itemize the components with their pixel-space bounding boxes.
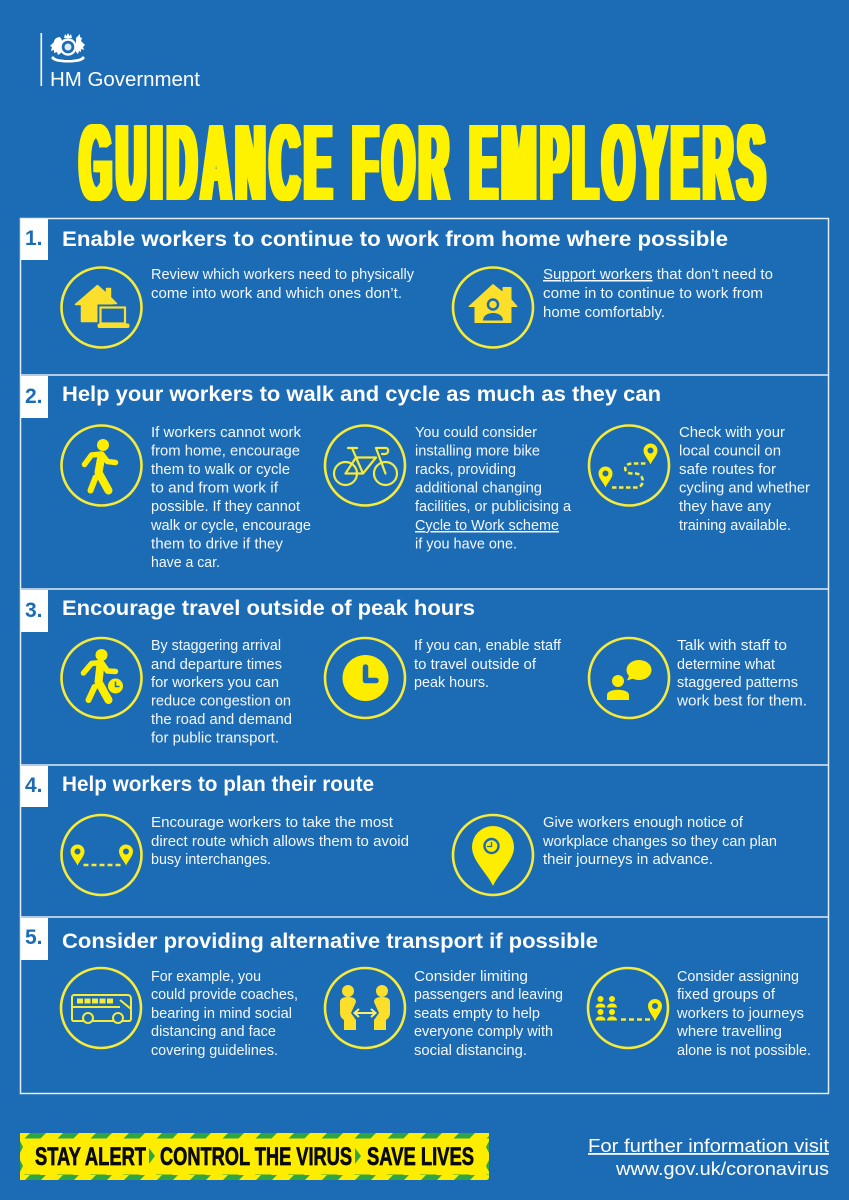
heading 1: Enable workers to continue to work from home where possible — [62, 228, 728, 251]
title: GUIDANCE FOR EMPLOYERS — [80, 102, 769, 224]
text: travel outside peak: to travel outside of — [414, 656, 537, 673]
text: fixed groups — [676, 968, 811, 1059]
text: give notice: their journeys in advance. — [543, 851, 713, 868]
text: support workers: home comfortably. — [543, 304, 665, 321]
number box 2: 2. — [25, 385, 43, 408]
text: travel outside peak: peak hours. — [414, 674, 489, 691]
text: coaches: covering guidelines. — [151, 1042, 278, 1059]
number box 3: 3. — [25, 599, 43, 622]
text: coaches: could provide coaches, — [151, 986, 298, 1003]
text: support workers: come in to continue to work from — [543, 285, 763, 302]
text: direct route: busy interchanges. — [151, 851, 271, 868]
text: travel outside peak: If you can, enable staff — [414, 637, 562, 654]
text: walk or cycle: If workers cannot work — [151, 424, 301, 441]
number box 1 — [21, 219, 48, 260]
text: review workers: come into work and which ones don’t. — [151, 285, 402, 302]
panel: section 5 — [21, 918, 811, 1059]
text: give notice — [542, 814, 777, 868]
text: fixed groups: alone is not possible. — [677, 1042, 811, 1059]
slogan banner: CONTROL THE VIRUS — [160, 1143, 352, 1171]
text: local council: Check with your — [679, 424, 785, 441]
text: walk or cycle: walk or cycle, encourage — [150, 517, 311, 534]
number box 4: 4. — [25, 774, 43, 797]
text: limit passengers: everyone comply with — [414, 1023, 553, 1040]
text: coaches: For example, you — [151, 968, 261, 985]
text: staggering times: for public transport. — [151, 730, 279, 746]
text: coaches: bearing in mind social — [151, 1005, 292, 1022]
number box 5: 5. — [25, 926, 43, 949]
text: local council — [679, 424, 810, 534]
text: talk with staff: determine what — [677, 656, 776, 673]
panel: section 1 — [21, 219, 773, 348]
text: limit passengers: passengers and leaving — [414, 986, 563, 1003]
further information: www.gov.uk/coronavirus — [615, 1159, 829, 1179]
text: talk with staff — [676, 637, 807, 710]
text: local council: training available. — [679, 517, 791, 534]
heading 4: Help workers to plan their route — [62, 773, 374, 796]
icon: pin with clock — [453, 815, 533, 895]
icon: royal coat of arms — [50, 33, 85, 62]
text: local council: cycling and whether — [679, 480, 810, 496]
text: bike facilities: if you have one. — [415, 536, 517, 552]
slogan banner — [20, 1133, 489, 1180]
text: walk or cycle — [150, 424, 311, 571]
number box 2 — [21, 376, 48, 418]
text: walk or cycle: possible. If they cannot — [151, 498, 301, 515]
icon: person talking — [589, 638, 669, 718]
text: limit passengers: Consider limiting — [414, 968, 528, 985]
number box 4 — [21, 766, 48, 807]
text: direct route: Encourage workers to take the most — [151, 814, 394, 831]
text: staggering times: the road and demand — [151, 711, 292, 728]
icon: clock — [325, 638, 405, 718]
text: staggering times: and departure times — [151, 656, 282, 673]
text: direct route: direct route which allows them to avoid — [151, 833, 409, 850]
text: limit passengers: seats empty to help — [414, 1005, 540, 1022]
text: staggering times — [151, 637, 292, 746]
text: staggering times: reduce congestion on — [151, 692, 291, 710]
text: walk or cycle: to and from work if — [151, 480, 279, 496]
text: bike facilities: installing more bike — [415, 442, 540, 460]
heading 2: Help your workers to walk and cycle as much as they can — [62, 383, 661, 406]
text: limit passengers — [414, 968, 563, 1059]
icon: walking person — [62, 426, 142, 506]
text: coaches: distancing and face — [151, 1023, 276, 1040]
text: fixed groups: workers to journeys — [676, 1005, 804, 1022]
text: bike facilities: additional changing — [415, 480, 542, 496]
text: walk or cycle: them to walk or cycle — [151, 461, 290, 478]
text: local council: safe routes for — [679, 461, 776, 478]
heading 5: Consider providing alternative transport if possible — [62, 930, 598, 953]
text: review workers: Review which workers need to physically — [151, 266, 414, 283]
text: support workers — [543, 266, 773, 321]
text: bike facilities — [415, 424, 572, 552]
icon: direct route pins — [62, 815, 142, 895]
icon: route with pins — [589, 426, 669, 506]
text: bike facilities: You could consider — [415, 424, 537, 441]
icon: two people distancing — [325, 968, 405, 1048]
further information — [588, 1136, 829, 1179]
text: support workers: Support workers that don’t need to — [543, 266, 773, 283]
number box 5 — [21, 918, 48, 960]
text: bike facilities: facilities, or publicising a — [415, 498, 572, 515]
text: talk with staff: staggered patterns — [677, 674, 798, 691]
text: bike facilities: racks, providing — [415, 461, 516, 478]
text: limit passengers: social distancing. — [414, 1042, 527, 1059]
text: give notice: workplace changes so they can plan — [542, 833, 777, 850]
text: review workers — [151, 266, 414, 302]
icon: bicycle — [325, 426, 405, 506]
text: coaches — [151, 968, 298, 1059]
text: walk or cycle: have a car. — [151, 554, 220, 571]
icon: house and laptop — [62, 268, 142, 348]
panel: section 3 — [21, 590, 807, 746]
text: HM Government: HM Government — [50, 68, 200, 91]
text: walk or cycle: from home, encourage — [151, 442, 300, 460]
number box 1: 1. — [25, 227, 43, 250]
text: staggering times: By staggering arrival — [151, 637, 281, 654]
slogan banner: SAVE LIVES — [367, 1143, 474, 1171]
panel: section 2 — [21, 376, 810, 571]
text: direct route — [151, 814, 409, 868]
text: talk with staff: Talk with staff to — [677, 637, 787, 654]
slogan banner: STAY ALERT — [35, 1143, 146, 1171]
text: local council: they have any — [679, 498, 771, 515]
text: fixed groups: fixed groups of — [677, 986, 776, 1003]
text: walk or cycle: them to drive if they — [151, 536, 283, 552]
further information: For further information visit — [588, 1136, 829, 1156]
content frame — [20, 218, 828, 1094]
text: bike facilities: Cycle to Work scheme — [415, 517, 559, 534]
text: local council: local council on — [679, 442, 781, 460]
icon: bus — [61, 968, 141, 1048]
text: fixed groups: where travelling — [676, 1023, 782, 1040]
text: talk with staff: work best for them. — [676, 692, 807, 710]
panel: section 4 — [21, 766, 777, 895]
icon: walker with clock — [62, 638, 142, 718]
number box 3 — [21, 590, 48, 632]
icon: fixed groups and pin — [588, 968, 668, 1048]
text: staggering times: for workers you can — [151, 674, 279, 691]
heading 3: Encourage travel outside of peak hours — [62, 597, 475, 620]
text: fixed groups: Consider assigning — [677, 968, 799, 985]
logo: HM Government — [40, 33, 200, 91]
text: give notice: Give workers enough notice of — [543, 814, 744, 831]
text: travel outside peak — [414, 637, 562, 691]
icon: house with person — [453, 268, 533, 348]
